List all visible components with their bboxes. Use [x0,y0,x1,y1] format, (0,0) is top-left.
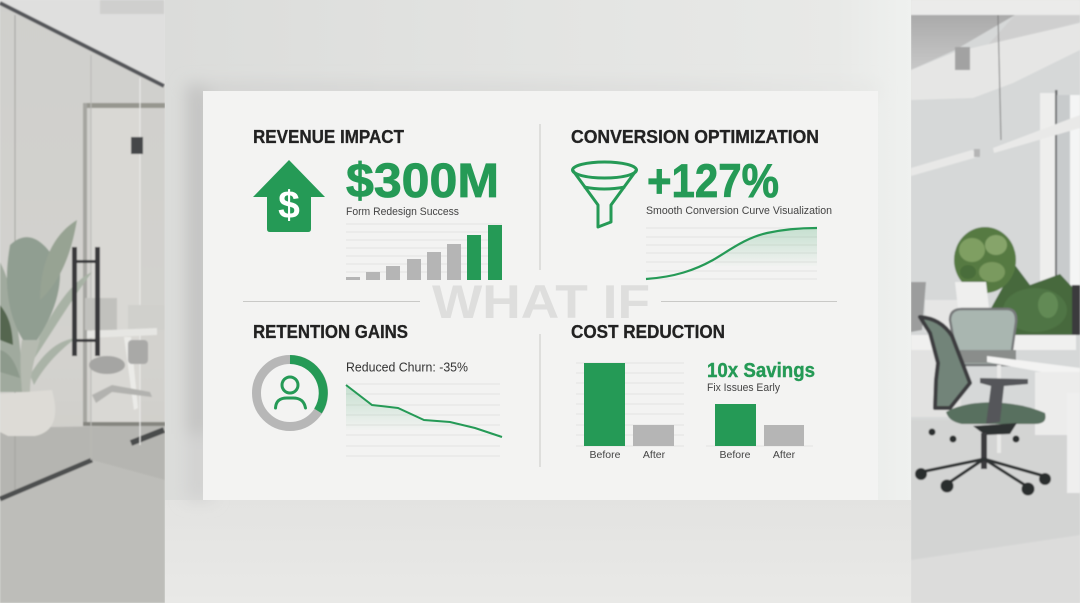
back chair [950,309,1016,365]
metric: 10x savings: 10x Savings [707,360,815,382]
front chair [915,317,1051,496]
metric: +127%: +127% [647,154,779,207]
panel: revenue impact [253,127,502,280]
caption: reduced churn: Reduced Churn: -35% [346,360,468,374]
bar chart: before and after, left [576,363,684,461]
panel shadow [186,84,878,500]
right open office background [911,0,1080,603]
plant pot [0,390,55,436]
left glass office background [0,0,165,603]
bar chart: before and after, right [706,404,813,461]
monitors [925,300,985,332]
heading: revenue impact: REVENUE IMPACT [253,127,404,147]
icon: dollar up arrow: $ [278,184,300,227]
window [1040,93,1055,283]
bar chart: before and after, left: After [643,449,666,461]
line chart: conversion curve [646,228,817,279]
white panel [203,91,878,500]
panel: retention gains [253,322,502,456]
floor [911,420,1080,603]
caption: form redesign success: Form Redesign Success [346,206,459,218]
wall lower area [165,500,911,603]
metric: $300M: $300M [346,155,499,208]
back desk [911,335,1076,350]
watermark: what if: WHAT IF [432,275,650,328]
icon: user retention donut [256,360,324,426]
bar chart: before and after, right: After [773,449,796,461]
front desk [987,356,1080,379]
door handle [72,247,100,356]
heading: cost reduction: COST REDUCTION [571,322,725,342]
plant behind glass [0,220,92,392]
icon: dollar up arrow [253,160,325,232]
background plants [954,227,1075,336]
line chart: churn [346,384,502,456]
dividers [243,124,837,467]
icon: funnel [572,162,636,227]
bar chart: revenue growth [346,224,502,280]
air vent [955,47,970,70]
panel: conversion optimization [571,127,832,279]
caption: fix issues early: Fix Issues Early [707,382,780,394]
heading: conversion optimization: CONVERSION OPTIMIZATION [571,127,819,147]
caption: smooth conversion curve: Smooth Conversion Curve Visualization [646,205,832,217]
heading: retention gains: RETENTION GAINS [253,322,408,342]
bar chart: before and after, left: Before [590,449,621,461]
pendant light [911,150,981,176]
central wall [165,0,911,603]
bar chart: before and after, right: Before [720,449,751,461]
panel: cost reduction [571,322,815,461]
desk and chair behind glass [85,298,165,410]
